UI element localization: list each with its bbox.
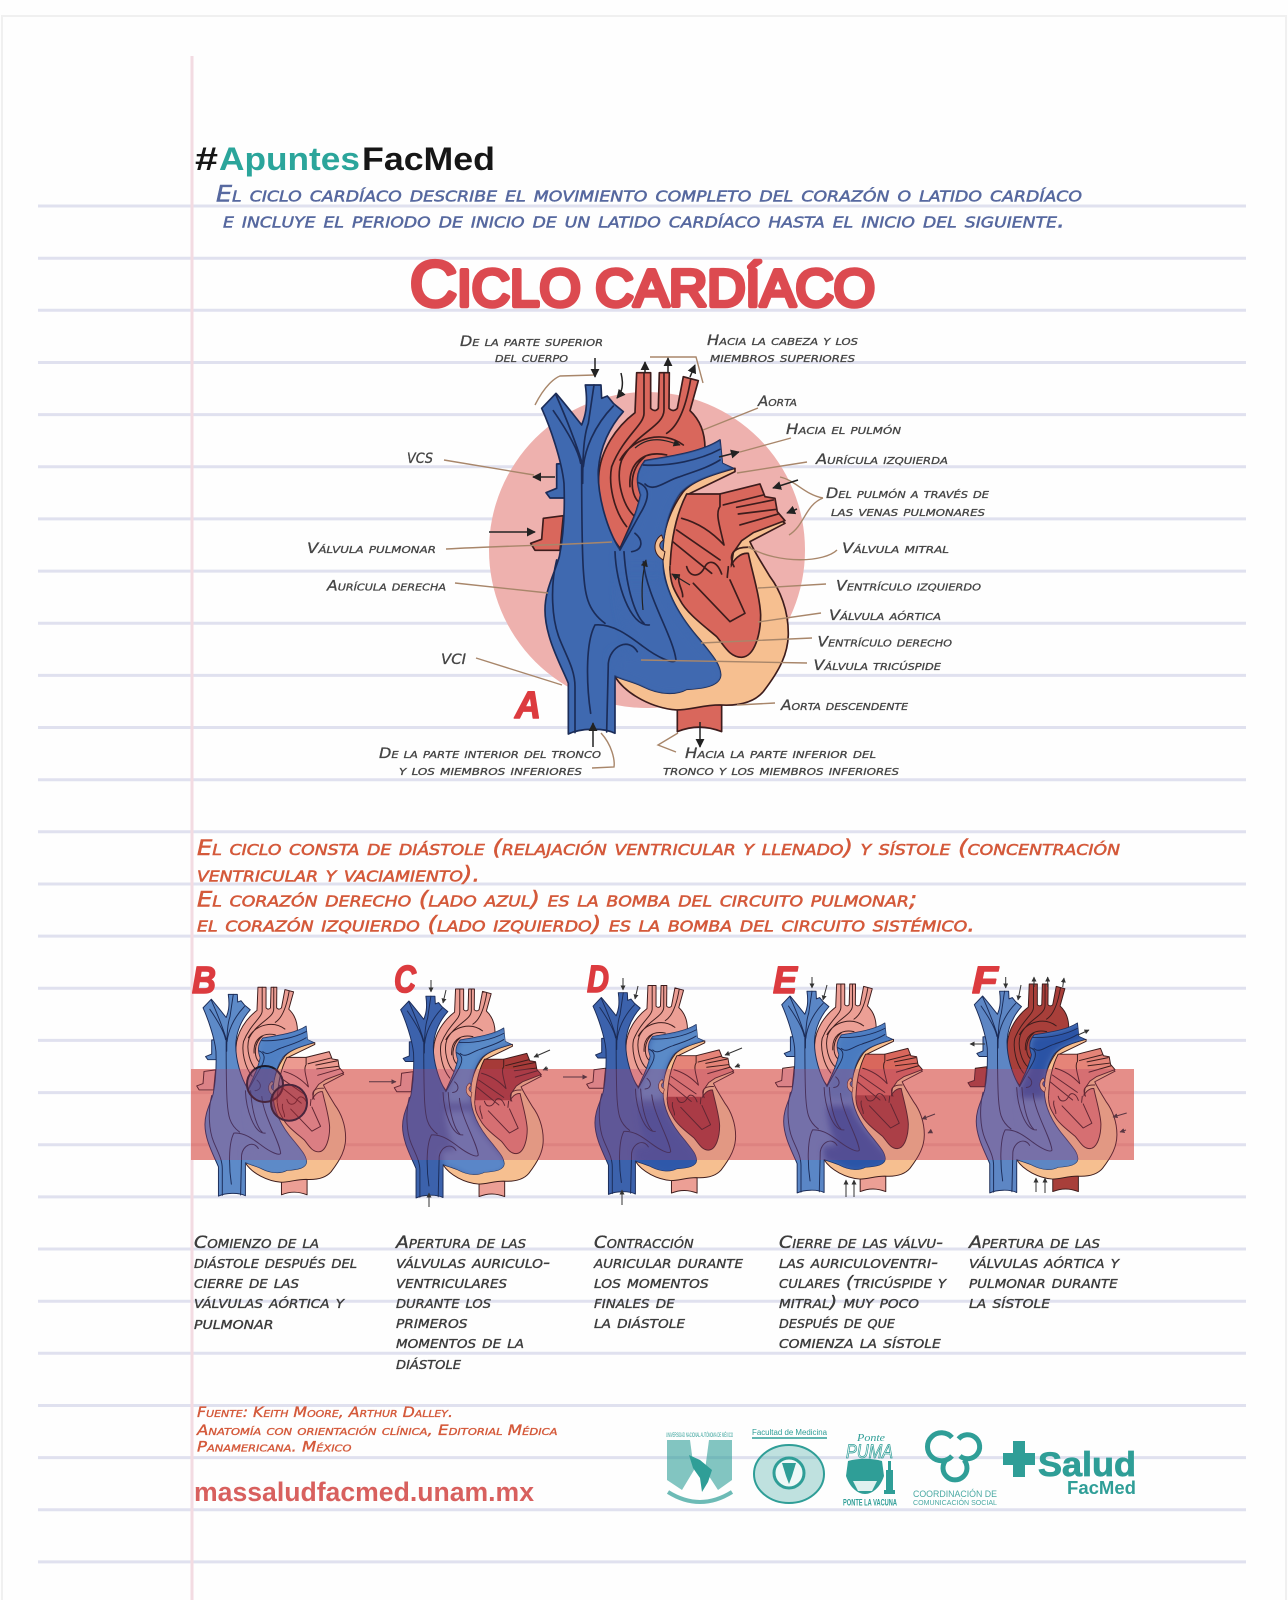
logo: Facultad de Medicina: Facultad de Medicina xyxy=(752,1428,828,1437)
label: tricuspid valve: Válvula tricúspide xyxy=(814,658,942,674)
logo: Coordinación de Comunicación Social xyxy=(913,1433,997,1507)
hashtag heading: # xyxy=(195,141,218,177)
logo: Ponte Puma: Ponte xyxy=(856,1432,885,1444)
caption D: los momentos xyxy=(594,1273,709,1293)
heart D xyxy=(563,978,742,1205)
explanatory paragraph: el corazón izquierdo (lado izquierdo) es la bomba del circuito sistémico. xyxy=(197,912,975,936)
label: mitral valve: Válvula mitral xyxy=(842,541,949,557)
logo: UNAM crest xyxy=(666,1432,733,1502)
label: head and arms: miembros superiores xyxy=(710,350,856,366)
caption F: pulmonar durante xyxy=(969,1273,1118,1293)
intro text: El ciclo cardíaco describe el movimiento completo del corazón o latido cardíaco xyxy=(216,182,1082,208)
caption C: ventriculares xyxy=(396,1273,507,1293)
label: upper body: del cuerpo xyxy=(495,350,568,366)
caption B: diástole después del xyxy=(194,1253,357,1273)
caption D: la diástole xyxy=(594,1313,685,1333)
label: descending aorta: Aorta descendente xyxy=(780,698,909,714)
leader lines xyxy=(444,357,837,768)
main title: CICLO CARDÍACO xyxy=(410,248,875,320)
caption E: después de que xyxy=(779,1313,895,1333)
source citation xyxy=(196,1405,558,1456)
band tint over hearts xyxy=(191,1069,1134,1160)
intro text: e incluye el periodo de inicio de un latido cardíaco hasta el inicio del siguiente. xyxy=(223,208,1065,234)
logo: Ponte Puma: PONTE LA VACUNA xyxy=(843,1498,897,1508)
label: head and arms: Hacia la cabeza y los xyxy=(707,333,859,349)
diagram A: heart anatomy xyxy=(307,333,990,779)
caption B: pulmonar xyxy=(194,1314,274,1334)
caption D: Contracción xyxy=(594,1233,694,1253)
caption E: culares (tricúspide y xyxy=(779,1273,948,1293)
caption B xyxy=(194,1233,357,1334)
label: head and arms xyxy=(707,333,859,366)
label: VCI: VCI xyxy=(441,652,466,668)
background circle xyxy=(489,392,805,708)
label: lower body out: Hacia la parte inferior del xyxy=(685,746,876,762)
flow arrows xyxy=(489,358,798,747)
caption C: válvulas auriculo- xyxy=(396,1253,550,1273)
hashtag heading xyxy=(195,141,495,177)
valve highlight circles xyxy=(247,1066,307,1121)
letter C: C xyxy=(394,959,416,1001)
label: right ventricle: Ventrículo derecho xyxy=(818,634,952,650)
explanatory paragraph xyxy=(197,836,1120,936)
caption B: válvulas aórtica y xyxy=(194,1293,346,1313)
label: pulmonary valve: Válvula pulmonar xyxy=(307,541,436,557)
caption F: Apertura de las xyxy=(968,1233,1100,1253)
label: from lung: las venas pulmonares xyxy=(831,504,986,520)
logo: +Salud FacMed xyxy=(1003,1441,1136,1498)
caption C: diástole xyxy=(396,1354,461,1374)
caption F: válvulas aórtica y xyxy=(969,1253,1121,1273)
caption B: Comienzo de la xyxy=(194,1233,319,1253)
logo: Ponte Puma xyxy=(843,1432,897,1508)
source citation: Anatomía con orientación clínica, Editorial Médica xyxy=(196,1423,558,1439)
caption E: mitral) muy poco xyxy=(779,1293,919,1313)
caption C xyxy=(395,1233,550,1374)
letter D: D xyxy=(587,959,609,1001)
label: VCS: VCS xyxy=(407,451,433,467)
heart E xyxy=(775,977,935,1197)
caption C: momentos de la xyxy=(396,1333,524,1353)
caption D xyxy=(593,1233,743,1333)
website url: massaludfacmed.unam.mx xyxy=(194,1477,534,1507)
caption E xyxy=(779,1233,948,1353)
heart C xyxy=(369,980,550,1207)
text: UNIVERSIDAD NACIONAL AUTÓNOMA DE MÉXICO xyxy=(666,1432,733,1439)
explanatory paragraph: El corazón derecho (lado azul) es la bomba del circuito pulmonar; xyxy=(197,888,917,912)
hashtag heading: FacMed xyxy=(362,141,495,177)
intro text xyxy=(216,182,1082,234)
label: to lung: Hacia el pulmón xyxy=(786,422,902,438)
source citation: Panamericana. México xyxy=(197,1440,352,1456)
letter F: F xyxy=(972,960,1000,1002)
heart illustration A xyxy=(531,373,788,734)
label: lower body out xyxy=(663,746,900,779)
arrows E xyxy=(812,977,935,1197)
pink band xyxy=(191,1069,1134,1160)
caption C: Apertura de las xyxy=(395,1233,526,1253)
logo: Coordinación de Comunicación Social: COMUNICACIÓN SOCIAL xyxy=(913,1498,997,1507)
label: upper body xyxy=(460,334,603,366)
arrows C xyxy=(369,980,550,1207)
logo: +Salud FacMed: Salud xyxy=(1038,1446,1136,1484)
label: lower body in: De la parte interior del tronco xyxy=(379,746,601,762)
logo: +Salud FacMed: FacMed xyxy=(1067,1478,1136,1498)
caption D: finales de xyxy=(594,1293,675,1313)
label: aorta: Aorta xyxy=(757,394,797,410)
heart B xyxy=(197,987,346,1196)
caption F: la sístole xyxy=(969,1293,1050,1313)
label: upper body: De la parte superior xyxy=(460,334,603,350)
caption B: cierre de las xyxy=(194,1273,299,1293)
label: right atrium: Aurícula derecha xyxy=(326,578,446,594)
label: lower body in xyxy=(379,746,601,779)
label: from lung xyxy=(826,486,990,520)
caption D: auricular durante xyxy=(593,1253,743,1273)
caption C: primeros xyxy=(396,1313,468,1333)
letter E: E xyxy=(773,960,799,1002)
heart F xyxy=(968,977,1127,1193)
letter A: A xyxy=(514,685,541,727)
label: lower body in: y los miembros inferiores xyxy=(399,763,583,779)
logo: Facultad de Medicina xyxy=(752,1428,828,1503)
label: left atrium: Aurícula izquierda xyxy=(815,452,948,468)
caption E: las auriculoventri- xyxy=(779,1253,938,1273)
explanatory paragraph: ventricular y vaciamiento). xyxy=(197,862,480,886)
letter B: B xyxy=(192,960,216,1002)
arrows D xyxy=(563,978,742,1205)
explanatory paragraph: El ciclo consta de diástole (relajación ventricular y llenado) y sístole (concentración xyxy=(197,836,1120,860)
label: lower body out: tronco y los miembros inferiores xyxy=(663,763,900,779)
caption F xyxy=(968,1233,1121,1313)
logo: Ponte Puma: PUMA xyxy=(846,1442,893,1463)
source citation: Fuente: Keith Moore, Arthur Dalley. xyxy=(197,1405,453,1421)
logo: Coordinación de Comunicación Social: COORDINACIÓN DE xyxy=(913,1489,997,1499)
arrows F xyxy=(970,977,1127,1193)
caption E: comienza la sístole xyxy=(779,1333,941,1353)
label: left ventricle: Ventrículo izquierdo xyxy=(836,578,981,594)
caption E: Cierre de las válvu- xyxy=(779,1233,943,1253)
caption C: durante los xyxy=(396,1293,491,1313)
label: aortic valve: Válvula aórtica xyxy=(829,608,941,624)
label: from lung: Del pulmón a través de xyxy=(826,486,990,502)
hashtag heading: Apuntes xyxy=(219,141,360,177)
